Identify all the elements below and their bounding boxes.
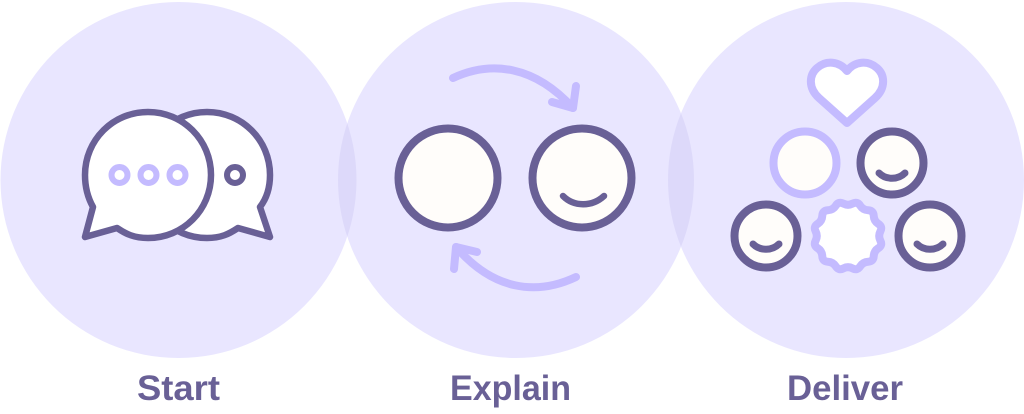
label: deliver: Deliver (787, 369, 903, 408)
badge: wavy seal (815, 203, 881, 269)
face: smiling (532, 128, 632, 228)
arrow: top clockwise (453, 68, 576, 108)
overlap: start and explain (338, 124, 356, 236)
icon: heart (811, 63, 883, 123)
panel: deliver circle (668, 2, 1024, 358)
label: start: Start (137, 369, 220, 408)
right speech bubble (144, 112, 270, 238)
icon: speech bubbles (85, 112, 270, 238)
panel: explain circle (338, 2, 694, 358)
left speech bubble (85, 112, 211, 238)
label: explain: Explain (450, 369, 571, 408)
dot: right bubble (227, 167, 243, 183)
face: top right smiling (860, 132, 924, 194)
icon: exchange cycle (398, 68, 632, 287)
dots: left bubble (112, 167, 186, 183)
face: neutral (398, 128, 498, 228)
icon: group of faces (734, 63, 962, 269)
panel: start circle (0, 2, 356, 358)
face: bottom left smiling (734, 204, 798, 268)
arrow: bottom clockwise (454, 247, 576, 287)
face: bottom right smiling (898, 204, 962, 268)
overlap: explain and deliver (668, 114, 694, 246)
face: lilac neutral (774, 132, 836, 194)
